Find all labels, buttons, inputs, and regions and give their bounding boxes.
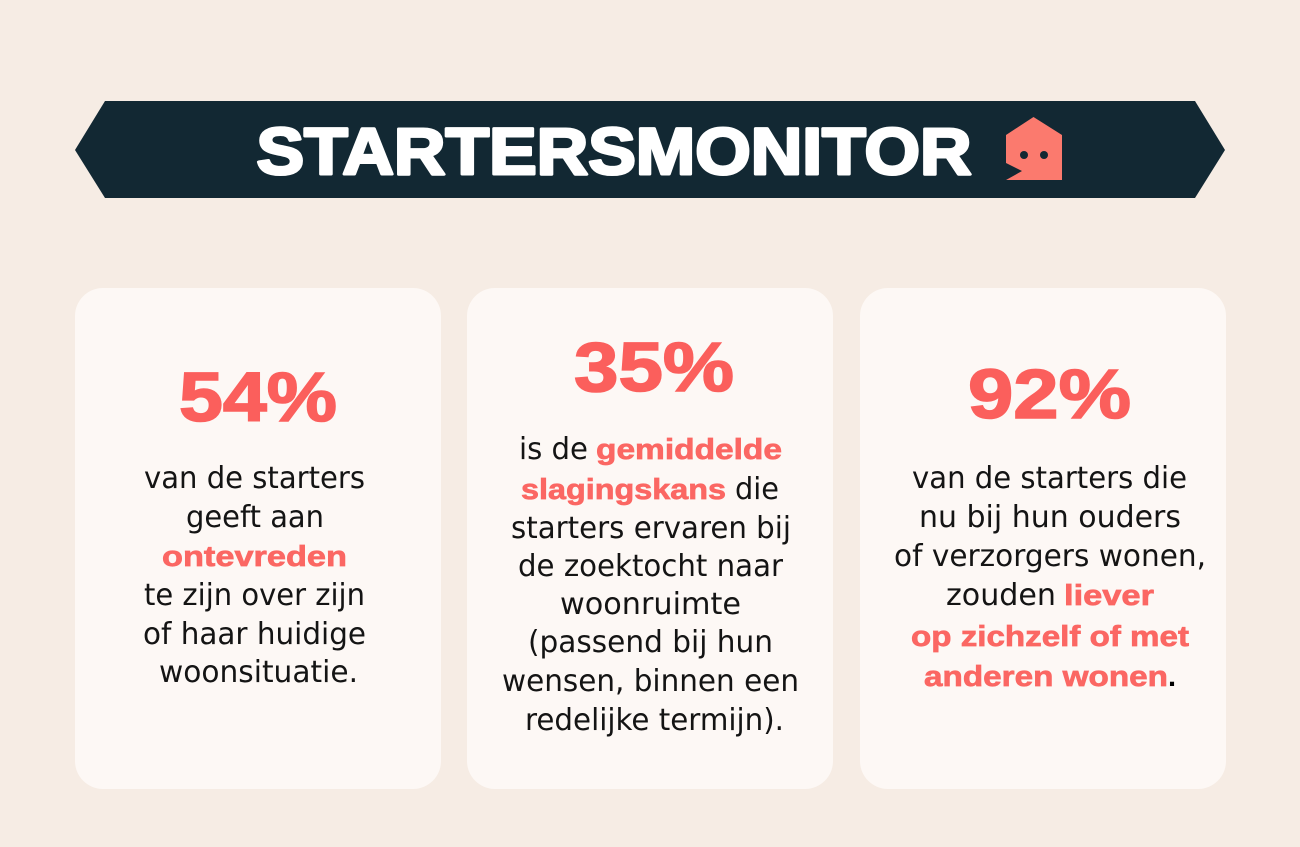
text block: 35%: woonruimte	[560, 587, 741, 622]
text block: 54%: geeft aan	[186, 500, 324, 535]
text block: 35%: wensen, binnen een	[502, 664, 799, 699]
text block: 54%: van de starters	[144, 461, 365, 496]
icon: house speech bubble	[1006, 117, 1062, 180]
panel: 54%	[75, 288, 441, 789]
text block: 92%: zouden	[946, 578, 1056, 613]
text block: 92%: liever	[1064, 580, 1154, 612]
statistic 92%: 92%	[968, 355, 1131, 433]
title: STARTERSMONITOR	[256, 114, 972, 188]
text block: 54%: of haar huidige	[143, 617, 366, 652]
text block: 35%: de zoektocht naar	[518, 549, 784, 584]
text block: 92%	[894, 461, 1206, 693]
panel: 92%	[860, 288, 1226, 789]
text block: 35%: gemiddelde	[596, 434, 782, 466]
text block: 92%: of verzorgers wonen,	[894, 539, 1206, 574]
text block: 54%: ontevreden	[162, 541, 347, 573]
statistic 35%: 35%	[574, 328, 734, 406]
text block: 35%: die	[735, 472, 779, 507]
text block: 92%: .	[1168, 661, 1176, 693]
panel: 35%	[467, 288, 833, 789]
text block: 35%	[502, 432, 799, 738]
text block: 54%: woonsituatie.	[159, 655, 358, 690]
text block: 92%: anderen wonen	[924, 661, 1168, 693]
statistic 54%: 54%	[179, 358, 337, 436]
text block: 35%: is de	[519, 432, 588, 467]
text block: 92%: nu bij hun ouders	[919, 500, 1181, 535]
text block: 92%: op zichzelf of met	[911, 621, 1189, 653]
text block: 54%	[143, 461, 366, 690]
text block: 35%: redelijke termijn).	[525, 703, 784, 738]
text block: 35%: starters ervaren bij	[511, 511, 791, 546]
text block: 54%: te zijn over zijn	[144, 578, 365, 613]
text block: 92%: van de starters die	[912, 461, 1187, 496]
text block: 35%: slagingskans	[521, 474, 726, 506]
text block: 35%: (passend bij hun	[528, 625, 773, 660]
header banner	[75, 101, 1225, 198]
